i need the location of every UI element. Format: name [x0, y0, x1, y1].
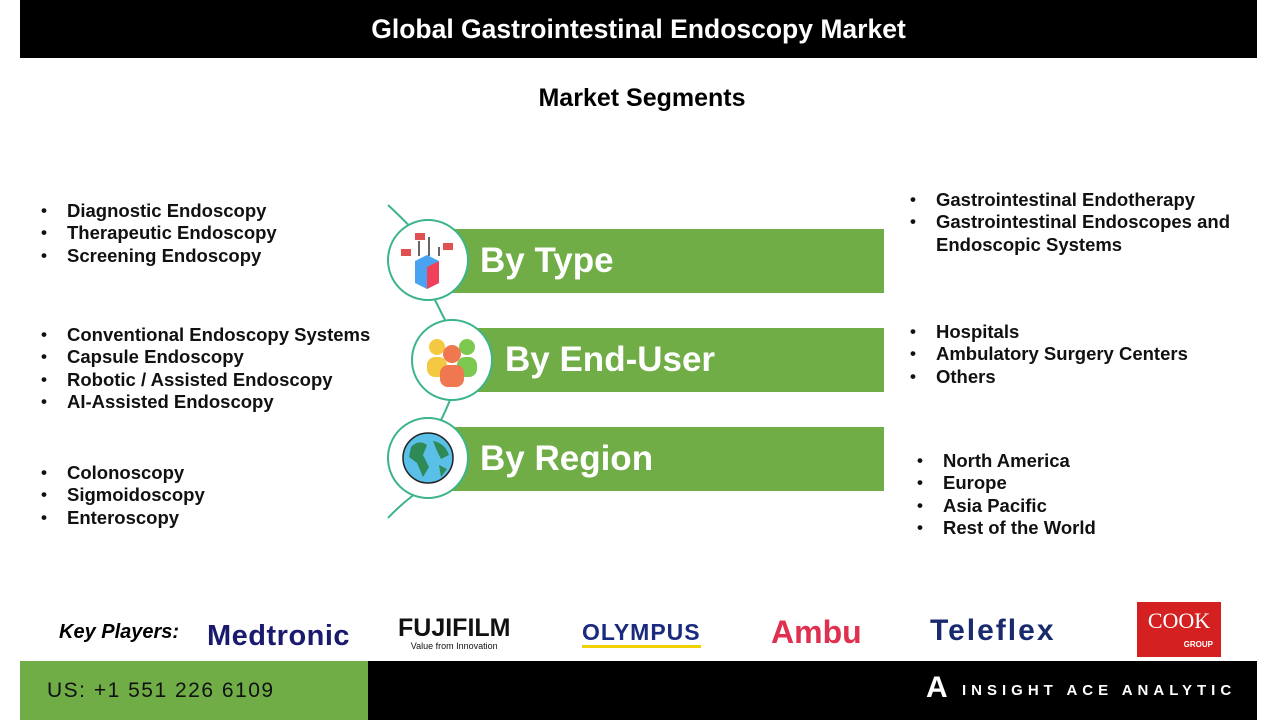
left list: region: Enteroscopy [67, 507, 179, 528]
logo: fujifilm: FUJIFILM [398, 614, 510, 642]
bar: by end-user: By End-User [505, 340, 715, 379]
right list: region: North America [943, 450, 1070, 471]
header bar [20, 0, 1257, 58]
right list: region: Asia Pacific [943, 495, 1047, 516]
left list: end-user: Robotic / Assisted Endoscopy [67, 369, 333, 390]
logo: ambu: Ambu [771, 614, 862, 650]
right list: end-user: Hospitals [936, 321, 1019, 342]
left list: region: Colonoscopy [67, 462, 184, 483]
logo: cook [1137, 602, 1221, 657]
footer phone [20, 661, 368, 720]
left list: type: Therapeutic Endoscopy [67, 222, 277, 243]
left list: type [42, 200, 277, 266]
right list: end-user: Ambulatory Surgery Centers [936, 343, 1188, 364]
logo: teleflex: Teleflex [930, 614, 1056, 647]
left list: type: Screening Endoscopy [67, 245, 261, 266]
footer brand [368, 661, 1257, 720]
bar: by end-user [465, 328, 884, 392]
icon: globe [387, 417, 469, 499]
icon: type [387, 219, 469, 301]
logo: medtronic: Medtronic [207, 620, 350, 652]
right list: region: Rest of the World [943, 517, 1096, 538]
bar: by region: By Region [480, 439, 653, 478]
bar: by type [440, 229, 884, 293]
bar: by type: By Type [480, 241, 614, 280]
left list: region [42, 462, 205, 528]
left list: type: Diagnostic Endoscopy [67, 200, 266, 221]
right list: end-user [910, 321, 1188, 387]
left list: end-user: AI-Assisted Endoscopy [67, 391, 274, 412]
footer phone: US: +1 551 226 6109 [47, 679, 275, 702]
logo: olympus: OLYMPUS [582, 619, 701, 645]
bar: by region [440, 427, 884, 491]
footer brand: A [926, 671, 948, 704]
right list: region [918, 450, 1096, 538]
left list: region: Sigmoidoscopy [67, 484, 205, 505]
right list: type: Gastrointestinal Endoscopes and Endoscopic Systems [936, 211, 1230, 255]
key players label: Key Players: [59, 621, 179, 643]
header bar: Global Gastrointestinal Endoscopy Market [371, 14, 906, 44]
subtitle: Market Segments [538, 84, 746, 112]
left list: end-user: Conventional Endoscopy Systems [67, 324, 370, 345]
icon: users [411, 319, 493, 401]
right list: type: Gastrointestinal Endotherapy [936, 189, 1195, 210]
logo: fujifilm: Value from Innovation [411, 641, 498, 651]
connector line [387, 204, 451, 519]
right list: end-user: Others [936, 366, 996, 387]
right list: type [910, 189, 1230, 255]
logo: cook: GROUP [1184, 640, 1213, 649]
logo: cook: COOK [1148, 608, 1210, 633]
right list: region: Europe [943, 472, 1007, 493]
footer brand: INSIGHT ACE ANALYTIC [962, 682, 1236, 699]
left list: end-user: Capsule Endoscopy [67, 346, 244, 367]
left list: end-user [42, 324, 370, 412]
